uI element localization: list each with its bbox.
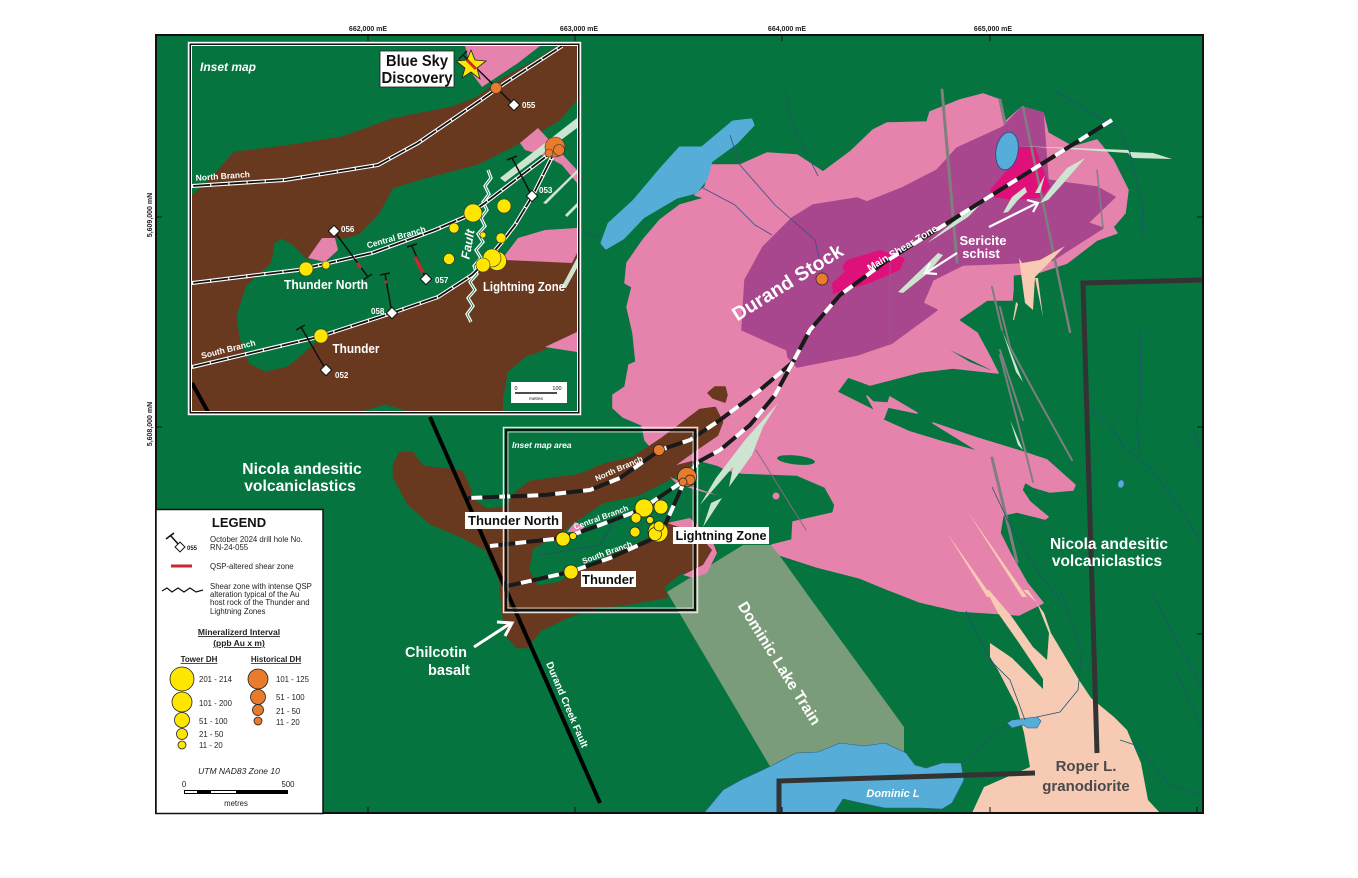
label: Inset map title: Inset map <box>200 60 256 74</box>
panel: inset map <box>188 42 581 415</box>
inset fault zigzag <box>467 170 491 322</box>
legend: Historical DH column <box>248 655 310 727</box>
legend: Tower DH column: 21 - 50 <box>199 730 224 739</box>
inset sericite lenses <box>500 118 577 288</box>
legend: mineralized interval heading: (ppb Au x m) <box>213 638 265 648</box>
inset scale bar: 0 <box>514 386 518 392</box>
Pond south <box>1007 717 1041 728</box>
inset basalt <box>192 46 577 411</box>
Durand Stock purple core <box>742 107 1115 367</box>
icon: Blue Sky Discovery star <box>456 50 486 79</box>
legend: Tower DH column: 101 - 200 <box>199 699 233 708</box>
Durand Creek Fault <box>430 417 600 803</box>
legend: Historical DH column: Historical DH <box>251 655 301 664</box>
inset North Branch line <box>192 46 562 186</box>
label: North Branch: North Branch <box>594 454 644 483</box>
arrow: Chilcotin basalt <box>474 622 512 647</box>
panel: legend <box>156 510 323 814</box>
legend: Tower DH column: 201 - 214 <box>199 675 233 684</box>
streams <box>540 90 1203 795</box>
green notch slivers in pink unit <box>777 350 993 466</box>
label: inset Thunder North: Thunder North <box>284 277 368 292</box>
legend: drill hole text <box>210 535 303 552</box>
label: Durand Creek Fault: Durand Creek Fault <box>543 660 590 750</box>
label: Inset map area: Inset map area <box>512 440 572 450</box>
Tiny pond east <box>1118 480 1124 488</box>
inset pink strip northeast <box>520 128 577 183</box>
drill hole 057 <box>407 244 449 285</box>
label: Chilcotin basalt <box>405 645 470 679</box>
gray dykes <box>756 90 1103 562</box>
inset pink lobe Thunder North <box>308 238 338 262</box>
inset Central Branch line <box>192 155 548 283</box>
legend: Tower DH column: 51 - 100 <box>199 717 228 726</box>
drill hole 052 <box>296 325 349 380</box>
inset South Branch line <box>192 157 552 367</box>
Small lake in stock <box>995 132 1019 170</box>
legend: drill hole text: RN-24-055 <box>210 543 249 552</box>
drill intercept circles on main map <box>556 273 828 579</box>
inset pink lobe Lightning <box>505 228 577 263</box>
legend: scale bar: metres <box>224 799 248 808</box>
legend: QSP symbol <box>171 564 192 568</box>
legend: Tower DH column <box>170 655 233 750</box>
coordinate labels: left axis: 5,609,000 mN <box>147 193 154 237</box>
inset pink at Blue Sky <box>465 46 540 87</box>
legend: drill hole text: October 2024 drill hole No. <box>210 535 303 544</box>
drill hole 055: 055 <box>522 101 536 110</box>
label box: Blue Sky Discovery: Blue Sky <box>386 53 448 70</box>
Chilcotin basalt main body <box>394 408 722 647</box>
coordinate labels: top axis <box>349 26 1012 33</box>
Dominic Lake <box>704 743 964 813</box>
label: inset Thunder: Thunder <box>332 341 380 356</box>
label: Sericite schist: Sericite <box>960 233 1006 248</box>
legend: shear zone text: host rock of the Thunder and <box>210 598 310 607</box>
drill hole 058: 058 <box>371 307 385 316</box>
legend: shear zone text: Lightning Zones <box>210 607 266 616</box>
basalt outlier <box>708 387 727 402</box>
legend: drill hole symbol: 055 <box>187 546 198 552</box>
legend title: LEGEND <box>212 515 266 530</box>
pink bit at Thunder North <box>567 522 585 532</box>
Durand Stock outer pink unit <box>613 94 1128 615</box>
legend: scale bar: 0 <box>182 780 187 789</box>
label: Chilcotin basalt: basalt <box>428 663 470 679</box>
coordinate labels: top axis: 665,000 mE <box>974 26 1012 33</box>
frame tick marks <box>156 35 1203 813</box>
sericite schist lenses <box>700 146 1172 527</box>
label: Sericite schist <box>960 233 1006 261</box>
label: Nicola andesitic volcaniclastics east: volcaniclastics <box>1052 553 1162 570</box>
claim boundary line east <box>1083 280 1203 753</box>
inset scale bar: metres <box>529 396 544 401</box>
label box: Thunder: Thunder <box>582 572 634 587</box>
map frame <box>156 35 1203 813</box>
legend: Historical DH column: 11 - 20 <box>276 718 300 727</box>
granodiorite strands <box>947 246 1065 597</box>
coordinate labels: top axis: 662,000 mE <box>349 26 387 33</box>
inset green southeast <box>503 352 577 411</box>
Dominic Lake Train band <box>667 545 904 768</box>
label: inset Lightning Zone: Lightning Zone <box>483 279 565 294</box>
inset frame <box>188 42 581 415</box>
arrow: sericite schist northeast <box>989 200 1038 227</box>
coordinate labels: top axis: 664,000 mE <box>768 26 806 33</box>
label: Dominic Lake Train: Dominic Lake Train <box>734 599 824 728</box>
inset pink southeast <box>545 332 577 352</box>
label box: Blue Sky Discovery: Discovery <box>382 70 453 87</box>
coordinate labels: left axis: 5,608,000 mN <box>147 402 154 446</box>
legend: scale bar: 500 <box>281 780 295 789</box>
pink strip by historical holes <box>670 477 730 498</box>
magenta alteration zone east <box>990 147 1050 200</box>
main geology map <box>156 35 1203 813</box>
label box: Thunder North: Thunder North <box>468 513 559 528</box>
legend: Historical DH column: 21 - 50 <box>276 707 301 716</box>
label: inset North Branch: North Branch <box>195 169 250 183</box>
label: Sericite schist: schist <box>962 246 1000 261</box>
magenta alteration zone west <box>832 250 905 294</box>
Big lake <box>602 120 753 248</box>
label: Nicola andesitic volcaniclastics west: volcaniclastics <box>244 478 356 495</box>
Nicola andesitic volcaniclastics background <box>156 35 1203 813</box>
label: Chilcotin basalt: Chilcotin <box>405 645 467 661</box>
legend: Tower DH column: 11 - 20 <box>199 741 223 750</box>
label: Durand Stock: Durand Stock <box>728 240 848 326</box>
legend: Historical DH column: 101 - 125 <box>276 675 310 684</box>
legend: UTM note: UTM NAD83 Zone 10 <box>198 766 280 776</box>
pink lobe at Lightning Zone <box>667 518 717 578</box>
coordinate labels: left axis <box>147 193 154 446</box>
legend: drill hole symbol <box>166 533 198 552</box>
label: Nicola andesitic volcaniclastics east: Nicola andesitic <box>1050 536 1168 553</box>
inset intercept circles <box>299 82 565 343</box>
drill hole 053 <box>507 156 553 202</box>
label box: Blue Sky Discovery <box>380 51 454 87</box>
legend: shear zone text <box>210 582 312 616</box>
label: Nicola andesitic volcaniclastics east <box>1051 538 1168 566</box>
legend: shear zone text: alteration typical of the Au <box>210 590 299 599</box>
legend: shear zone symbol <box>162 588 203 592</box>
Main Shear Zone trunk and branches <box>468 120 1112 586</box>
drill hole 053: 053 <box>539 186 553 195</box>
drill hole 056: 056 <box>341 225 355 234</box>
label box: Lightning Zone: Lightning Zone <box>676 528 766 543</box>
drill hole 052: 052 <box>335 371 349 380</box>
inset scale bar: 100 <box>552 386 562 392</box>
drill hole 058 <box>371 273 398 319</box>
arrow: sericite schist southwest <box>925 253 957 274</box>
coordinate labels: top axis: 663,000 mE <box>560 26 598 33</box>
legend: shear zone text: Shear zone with intense QSP <box>210 582 312 591</box>
legend: QSP text: QSP-altered shear zone <box>210 562 294 571</box>
claim boundary line south <box>779 773 1035 813</box>
label: inset South Branch: South Branch <box>200 337 257 361</box>
label: Central Branch: Central Branch <box>573 504 630 532</box>
label: Dominic L: Dominic L <box>866 788 920 800</box>
label: Roper L. granodiorite: granodiorite <box>1042 778 1130 795</box>
label: Nicola andesitic volcaniclastics west: Nicola andesitic <box>242 461 362 478</box>
label: Roper L. granodiorite: Roper L. <box>1056 758 1116 775</box>
label: South Branch: South Branch <box>581 539 633 566</box>
label: inset Central Branch: Central Branch <box>366 224 427 250</box>
label: Main Shear Zone: Main Shear Zone <box>866 223 940 274</box>
drill hole 057: 057 <box>435 276 449 285</box>
label: inset Fault: Fault <box>459 228 478 260</box>
drill hole 056 <box>328 225 372 280</box>
label: Nicola andesitic volcaniclastics west <box>243 462 362 491</box>
inset scale bar <box>511 382 567 403</box>
inset Durand Creek Fault <box>192 383 208 412</box>
drill hole 055 <box>459 51 536 111</box>
label: Roper L. granodiorite <box>1042 758 1130 795</box>
legend: scale bar <box>182 780 295 808</box>
small pink outlier <box>772 492 780 500</box>
inset map area frame <box>504 428 698 612</box>
legend: mineralized interval heading: Mineralizerd Interval <box>198 627 280 637</box>
legend: mineralized interval heading <box>198 627 280 648</box>
legend: Historical DH column: 51 - 100 <box>276 693 305 702</box>
Roper Lake granodiorite <box>972 590 1160 813</box>
legend: Tower DH column: Tower DH <box>181 655 218 664</box>
